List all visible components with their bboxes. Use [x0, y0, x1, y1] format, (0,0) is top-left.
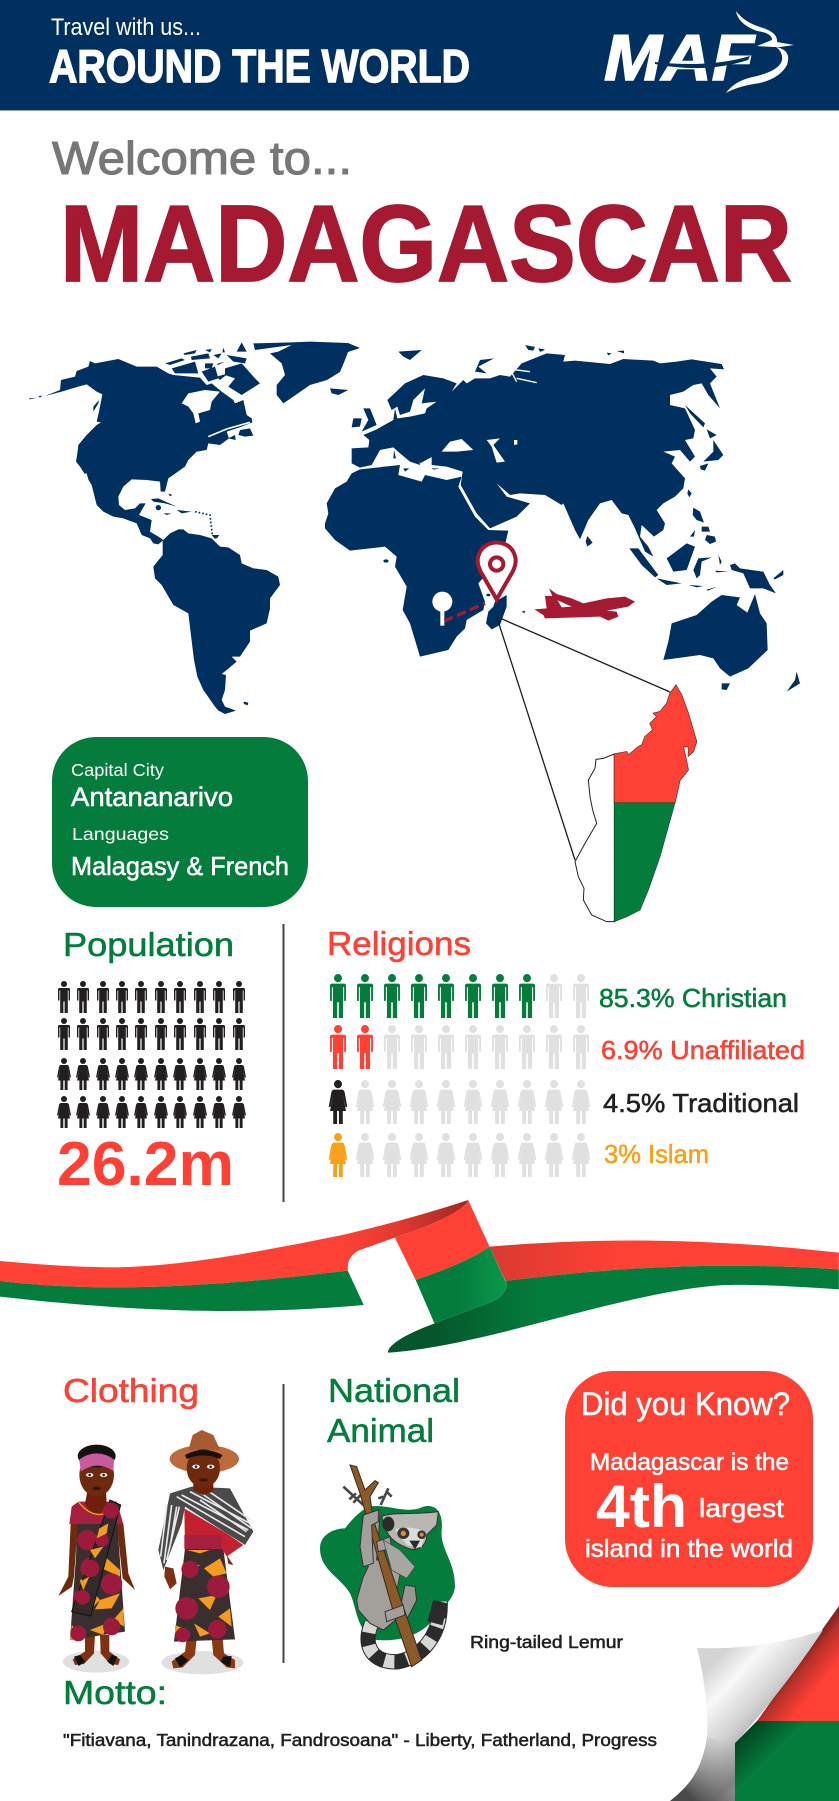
language names: Malagasy & French: [71, 851, 289, 881]
divider: [282, 924, 284, 1202]
white origin pin: [432, 592, 452, 626]
north america and greenland: [29, 342, 360, 544]
national animal heading: National: [328, 1373, 460, 1410]
pointer lines to inset: [497, 617, 670, 860]
plane: [534, 588, 635, 621]
clothing heading: Clothing: [63, 1373, 199, 1410]
lemur arms: [360, 1510, 405, 1622]
branch: [350, 1465, 422, 1667]
divider: [282, 1384, 284, 1663]
header title: AROUND THE WORLD: [49, 40, 470, 92]
fact text: [585, 1449, 793, 1563]
population heading: Population: [63, 927, 234, 964]
madagascar on map: [486, 595, 507, 629]
header banner: [0, 0, 839, 111]
lemur body: [357, 1510, 405, 1630]
population pictogram: [57, 981, 246, 1128]
woman in traditional dress: [58, 1445, 135, 1673]
crimson location pin: [478, 542, 516, 599]
european and atlantic islands: [330, 345, 545, 472]
motto heading: Motto:: [63, 1675, 167, 1712]
flag ribbon: [0, 1200, 839, 1353]
christian label: 85.3% Christian: [599, 983, 787, 1013]
lemur illustration: [320, 1465, 455, 1667]
header tagline: Travel with us...: [51, 14, 201, 41]
unaffiliated label: 6.9% Unaffiliated: [601, 1035, 805, 1065]
national animal heading: Animal: [327, 1413, 434, 1450]
box heading: Did you Know?: [581, 1386, 790, 1422]
fact text: 4th: [596, 1473, 687, 1540]
capital name: Antananarivo: [71, 782, 233, 812]
inland seas: [442, 438, 517, 463]
motto text: "Fitiavana, Tanindrazana, Fandrosoana" - Liberty, Fatherland, Progress: [63, 1730, 657, 1750]
lemur chest: [383, 1540, 415, 1578]
unaffiliated pictogram row: [330, 1025, 589, 1069]
fact text: largest: [699, 1493, 785, 1523]
lemur head: [382, 1512, 438, 1549]
traditional pictogram row: [329, 1080, 590, 1124]
page curl revealing flag: [670, 1606, 839, 1801]
welcome heading: Welcome to...: [52, 132, 352, 184]
did you know box: [565, 1371, 813, 1587]
population figure: 26.2m: [57, 1130, 234, 1199]
islam label: 3% Islam: [604, 1139, 709, 1169]
world map: [29, 342, 800, 860]
asian and pacific islands: [522, 347, 800, 692]
religions heading: Religions: [327, 926, 471, 963]
eurasia: [352, 353, 724, 557]
christian pictogram row: [330, 974, 589, 1018]
lemur caption: Ring-tailed Lemur: [470, 1632, 623, 1652]
australia: [663, 594, 768, 677]
fact text: island in the world: [585, 1535, 793, 1563]
leaves: [343, 1487, 392, 1505]
fact text: Madagascar is the: [590, 1449, 789, 1476]
population panel: [57, 927, 246, 1199]
islam pictogram row: [329, 1133, 590, 1177]
madagascar flag inset: [575, 685, 697, 922]
MAF logo: MAF: [604, 21, 756, 94]
south america: [153, 529, 280, 714]
green blob: [320, 1506, 455, 1640]
traditional label: 4.5% Traditional: [603, 1088, 799, 1118]
capital label: Capital City: [71, 760, 164, 780]
africa: [325, 465, 508, 657]
national animal heading: [327, 1373, 460, 1450]
languages label: Languages: [72, 824, 169, 844]
MAF logo: [604, 11, 794, 94]
man with hat and shawl: [158, 1430, 253, 1674]
rear leg: [398, 1585, 417, 1630]
striped tail: [368, 1602, 441, 1662]
info box: capital and languages: [52, 737, 308, 907]
africa, europe and asia: [325, 345, 800, 860]
country title: MADAGASCAR: [60, 183, 792, 305]
clothing illustration: [58, 1430, 253, 1674]
dashed flight path: [444, 603, 485, 621]
religions panel: [327, 926, 805, 1177]
